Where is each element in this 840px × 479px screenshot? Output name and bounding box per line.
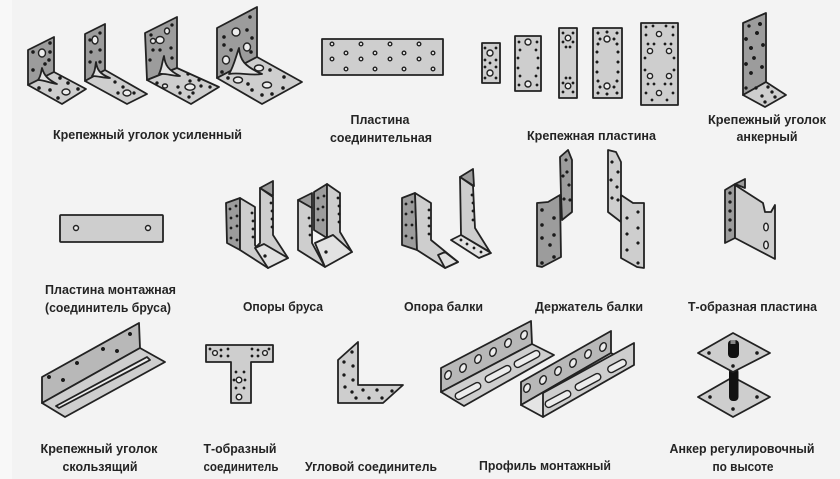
icon: sliding angle (42, 323, 165, 417)
label: sliding angle (40, 442, 158, 474)
panel: anchor angle (708, 13, 827, 144)
icon: beam holder right (608, 150, 644, 268)
label: mounting plate: Пластина монтажная (45, 283, 176, 297)
label: T-shaped connector: соединитель (204, 460, 279, 474)
label: mounting plate (45, 283, 176, 315)
label: mounting profile: Профиль монтажный (479, 459, 611, 473)
panel: sliding angle (40, 323, 165, 474)
label: height-adjustable anchor: по высоте (712, 460, 774, 474)
label: T-shaped connector (204, 442, 279, 474)
label: reinforced angle: Крепежный уголок усиленный (53, 128, 242, 142)
panel: mounting plate (45, 215, 176, 315)
icon: plate 5 (641, 23, 678, 105)
icon: reinforced angle 4 (217, 7, 302, 104)
icon: corner connector (338, 342, 403, 403)
panel: T-shaped plate (688, 179, 818, 314)
icon: height-adjustable anchor (698, 333, 770, 417)
icon: reinforced angle 1 (28, 37, 86, 104)
icon: timber support 1 (226, 181, 288, 268)
label: connecting plate: Пластина (350, 113, 411, 127)
panel: connecting plate (322, 39, 443, 145)
icon: L-profile (441, 321, 554, 406)
panel: corner connector (305, 342, 437, 474)
label: connecting plate (330, 113, 432, 145)
icon: plate 3 (559, 28, 577, 98)
label: anchor angle: анкерный (736, 130, 798, 144)
icon: mounting plate (60, 215, 163, 242)
panel: fastening plates (482, 23, 678, 143)
icon: plate 2 (515, 36, 541, 91)
label: height-adjustable anchor (670, 442, 814, 474)
label: sliding angle: скользящий (62, 460, 138, 474)
panel: beam holder (535, 150, 644, 314)
icon: T-shaped connector (206, 345, 273, 403)
label: anchor angle: Крепежный уголок (708, 113, 827, 127)
label: beam holder: Держатель балки (535, 300, 643, 314)
panel: mounting profile (441, 321, 634, 473)
label: T-shaped plate: Т-образная пластина (688, 300, 818, 314)
panel: T-shaped connector (204, 345, 279, 474)
icon: beam support right part (451, 169, 491, 258)
icon: beam holder left (537, 150, 572, 267)
panel: height-adjustable anchor (670, 333, 814, 474)
icon: reinforced angle 3 (145, 17, 219, 104)
icon: connecting plate (322, 39, 443, 75)
icon: reinforced angle 2 (85, 24, 147, 104)
icon: U-profile (521, 331, 634, 417)
label: anchor angle (708, 113, 827, 144)
label: sliding angle: Крепежный уголок (40, 442, 158, 456)
panel: reinforced fastening angles (28, 7, 302, 142)
label: corner connector: Угловой соединитель (305, 460, 437, 474)
panel: beam support (402, 169, 491, 314)
icon: beam support left part (402, 193, 458, 268)
label: T-shaped connector: Т-образный (204, 442, 276, 456)
icon: timber support 2 (298, 184, 352, 267)
label: timber supports: Опоры бруса (243, 300, 324, 314)
icon: plate 4 (593, 28, 622, 98)
label: connecting plate: соединительная (330, 131, 432, 145)
icon: plate 1 (482, 43, 500, 83)
label: fastening plates: Крепежная пластина (527, 129, 657, 143)
icon: T-shaped plate (725, 179, 775, 259)
label: beam support: Опора балки (404, 300, 483, 314)
panel: timber supports (226, 181, 352, 314)
label: mounting plate: (соединитель бруса) (45, 301, 171, 315)
label: height-adjustable anchor: Анкер регулировочный (670, 442, 814, 456)
icon: anchor angle (743, 13, 786, 107)
